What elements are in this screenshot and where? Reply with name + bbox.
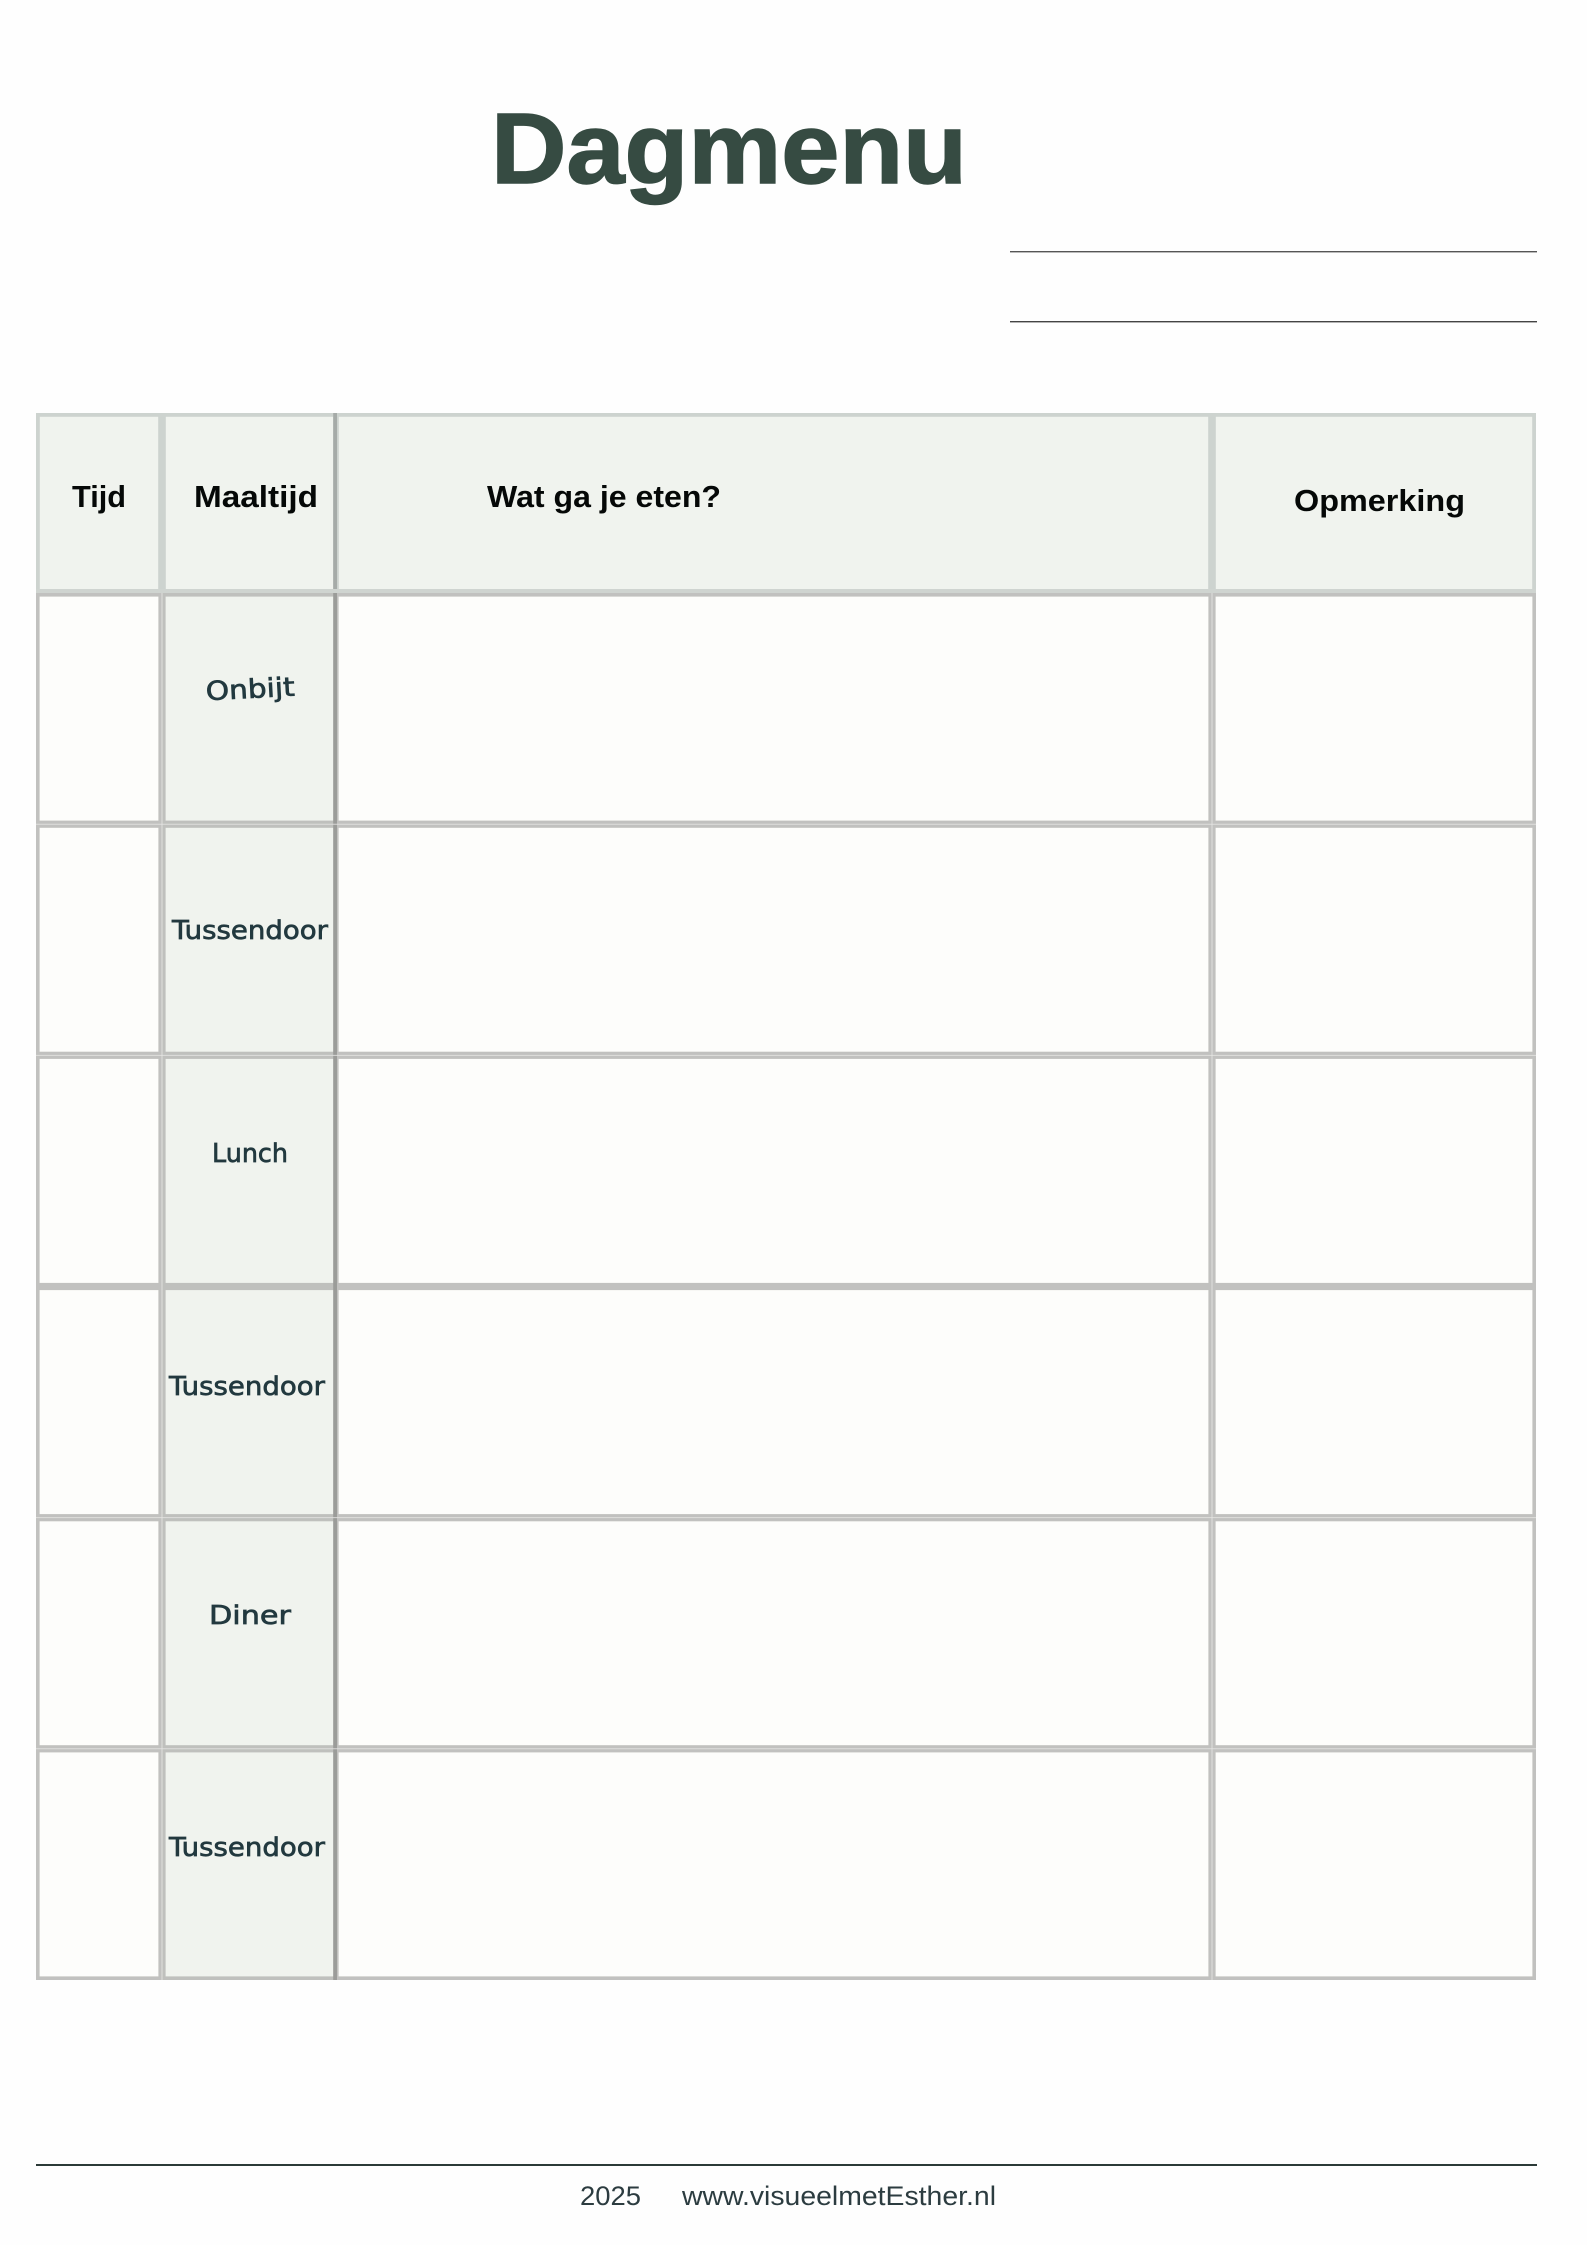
row: Lunch: Lunch xyxy=(212,1139,288,1169)
row: Tussendoor 2 xyxy=(38,1286,1534,1518)
table header row: Tijd xyxy=(72,479,126,514)
table header row: Maaltijd xyxy=(194,479,318,514)
row: Tussendoor 1: Tussendoor xyxy=(171,916,328,946)
title: Dagmenu xyxy=(491,93,967,205)
row: Diner: Diner xyxy=(209,1601,291,1631)
name and date write-in lines xyxy=(1010,251,1537,322)
table header row: Opmerking xyxy=(1294,483,1465,518)
table header row: Wat ga je eten? xyxy=(487,479,721,514)
footer text: www.visueelmetEsther.nl xyxy=(681,2181,996,2211)
footer rule xyxy=(36,2164,1537,2166)
row: Tussendoor 2: Tussendoor xyxy=(168,1372,325,1402)
table header row xyxy=(36,413,1536,593)
footer text: 2025 xyxy=(580,2181,641,2211)
row: Onbijt: Onbijt xyxy=(205,673,295,707)
row: Tussendoor 1 xyxy=(38,824,1534,1055)
row: Diner xyxy=(38,1518,1534,1749)
row: Lunch xyxy=(38,1055,1534,1286)
row: Tussendoor 3 xyxy=(38,1749,1534,1980)
row: Onbijt xyxy=(38,593,1534,824)
row: Tussendoor 3: Tussendoor xyxy=(168,1833,325,1863)
table xyxy=(36,413,1536,1980)
